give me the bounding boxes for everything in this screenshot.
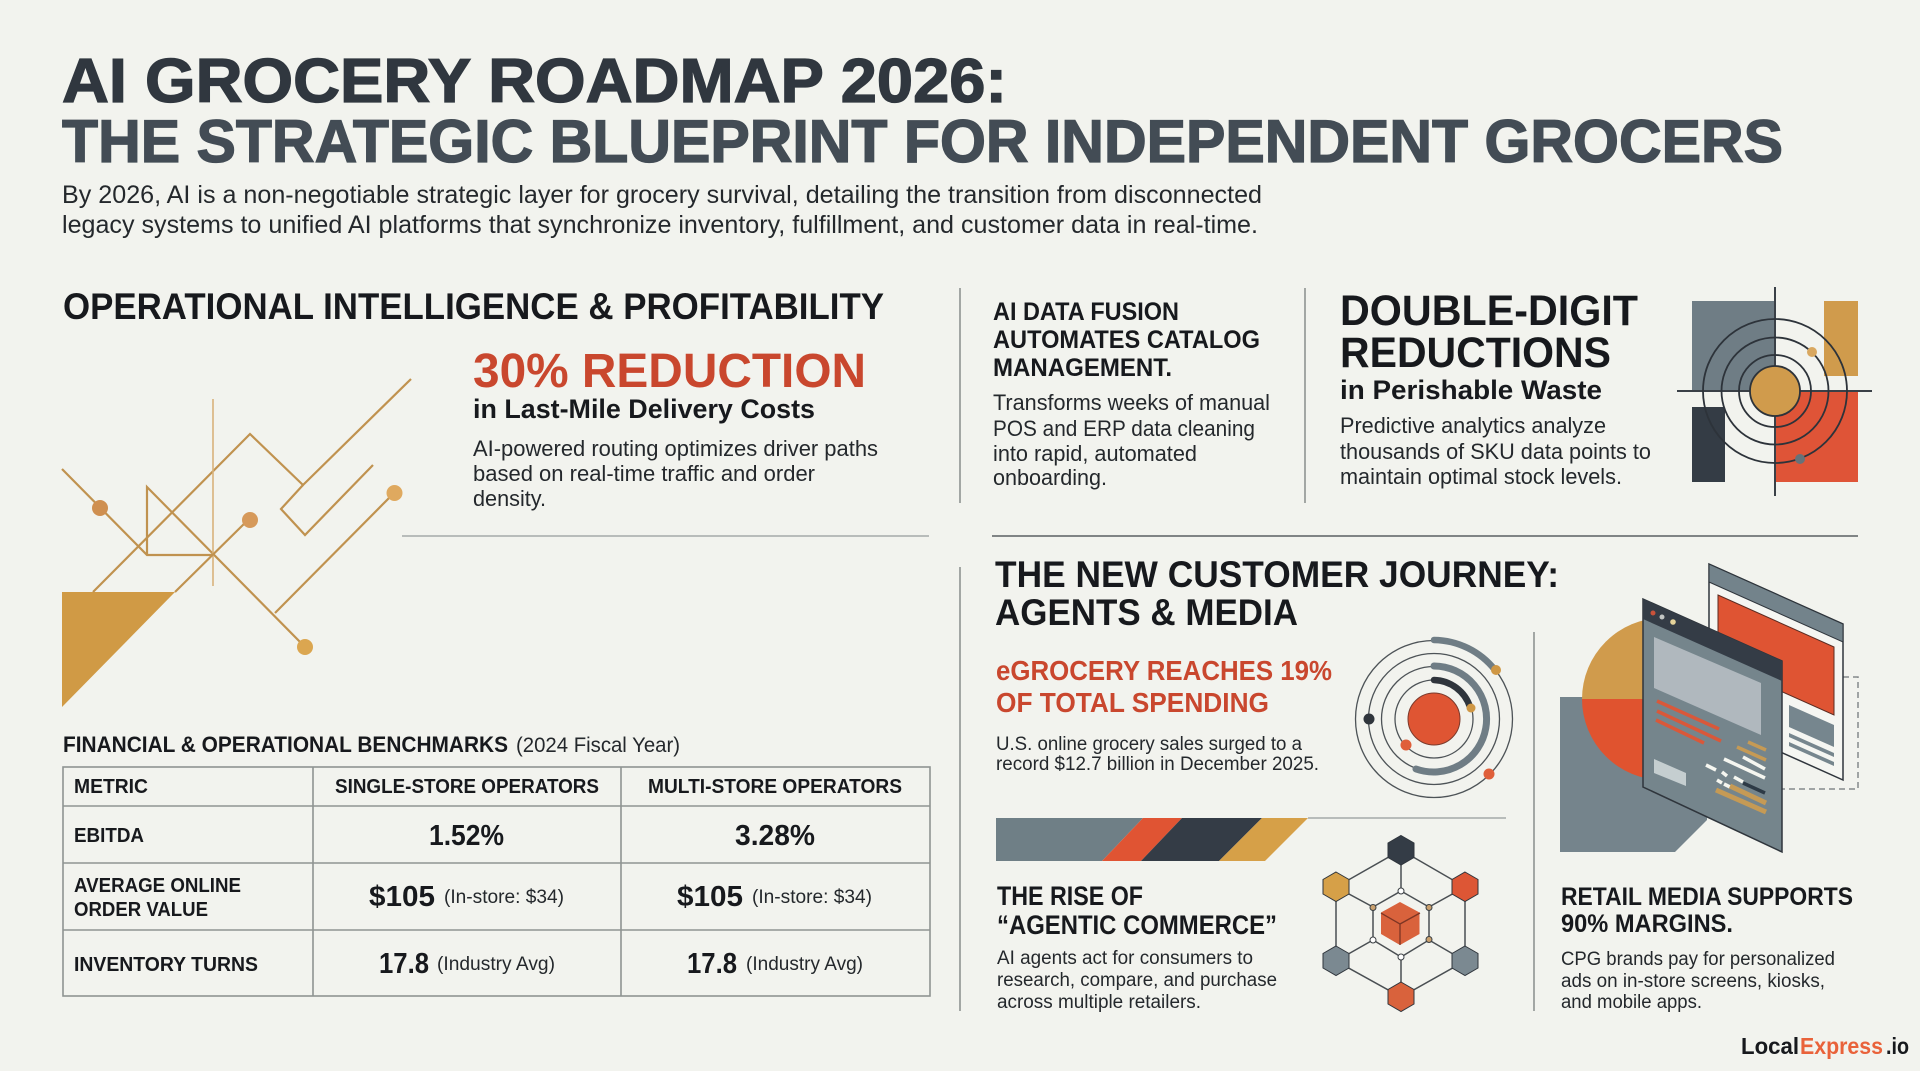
benchmarks table: 3.28% [735,820,815,852]
logo: LocalExpress.io [1741,1033,1909,1059]
title: AI GROCERY ROADMAP 2026: [62,47,1007,116]
illustration: delivery routes [62,379,411,707]
benchmarks table: ORDER VALUE [74,899,208,921]
stat: eGrocery share: U.S. online grocery sales surged to a [996,734,1302,755]
heading: new customer journey [995,553,1559,633]
icon: orbit rings [1356,640,1512,798]
panel: agentic commerce: AI agents act for consumers to [997,948,1253,969]
illustration: retail media screens [1560,564,1858,852]
stat: eGrocery share: record $12.7 billion in December 2025. [996,754,1319,775]
panel: AI data fusion [993,298,1270,490]
icon: hexagon network [1323,836,1478,1012]
benchmarks table: (In-store: $34) [444,887,564,908]
benchmarks table: $105 [677,881,743,913]
benchmarks table: INVENTORY TURNS [74,954,258,976]
table heading: FINANCIAL & OPERATIONAL BENCHMARKS [63,732,508,757]
benchmarks table: 1.52% [429,820,504,852]
stat: eGrocery share: eGROCERY REACHES 19% [996,655,1332,686]
panel: double-digit reductions: maintain optimal stock levels. [1340,464,1622,489]
panel: double-digit reductions: REDUCTIONS [1340,329,1611,377]
benchmarks table: (Industry Avg) [746,954,863,975]
panel: retail media: 90% MARGINS. [1561,910,1733,938]
benchmarks table: AVERAGE ONLINE [74,875,241,897]
callout: 30% reduction [473,345,878,511]
benchmarks table: 17.8 [379,948,429,980]
benchmarks table: $105 [369,881,435,913]
panel: retail media: ads on in-store screens, kiosks, [1561,971,1825,992]
panel: retail media: RETAIL MEDIA SUPPORTS [1561,883,1853,911]
benchmarks table: MULTI-STORE OPERATORS [648,776,902,798]
panel: AI data fusion: AI DATA FUSION [993,298,1179,326]
panel: AI data fusion: MANAGEMENT. [993,354,1172,382]
dashed connector [1780,677,1858,789]
panel: double-digit reductions: DOUBLE-DIGIT [1340,287,1638,335]
panel: double-digit reductions: in Perishable Waste [1340,375,1602,405]
icon: concentric target [1677,287,1872,496]
panel: double-digit reductions: Predictive analytics analyze [1340,413,1606,438]
callout: 30% reduction: 30% REDUCTION [473,345,866,398]
benchmarks table [63,767,930,996]
stat: eGrocery share: OF TOTAL SPENDING [996,687,1269,718]
heading: operational intelligence: OPERATIONAL INTELLIGENCE & PROFITABILITY [63,286,884,327]
logo: LocalExpress.io: Local [1741,1033,1799,1059]
panel: agentic commerce: THE RISE OF [997,881,1143,911]
panel: AI data fusion: AUTOMATES CATALOG [993,326,1260,354]
panel: agentic commerce: across multiple retailers. [997,992,1201,1013]
logo: LocalExpress.io: Express [1800,1033,1883,1059]
panel: AI data fusion: POS and ERP data cleaning [993,416,1255,441]
back screen [1709,564,1843,780]
benchmarks table: SINGLE-STORE OPERATORS [335,776,599,798]
table heading: (2024 Fiscal Year) [516,734,680,757]
callout: 30% reduction: based on real-time traffic and order [473,461,815,486]
stat: eGrocery share [996,655,1332,775]
heading: new customer journey: THE NEW CUSTOMER JOURNEY: [995,553,1559,595]
benchmarks table: EBITDA [74,825,144,847]
panel: AI data fusion: into rapid, automated [993,441,1197,466]
benchmarks table: (Industry Avg) [437,954,555,975]
logo: LocalExpress.io: .io [1886,1033,1909,1059]
heading: new customer journey: AGENTS & MEDIA [995,591,1298,633]
panel: AI data fusion: onboarding. [993,465,1107,490]
benchmarks table: (In-store: $34) [752,887,872,908]
title [62,47,1783,175]
intro paragraph: legacy systems to unified AI platforms that synchronize inventory, fulfillment, and customer data in real-time. [62,211,1258,239]
panel: retail media: and mobile apps. [1561,992,1702,1013]
intro paragraph [62,181,1262,239]
panel: double-digit reductions [1340,287,1651,489]
front screen [1643,599,1782,852]
callout: 30% reduction: in Last-Mile Delivery Costs [473,394,815,424]
panel: agentic commerce: research, compare, and purchase [997,970,1277,991]
panel: retail media [1561,883,1853,1013]
panel: double-digit reductions: thousands of SKU data points to [1340,439,1651,464]
benchmarks table: METRIC [74,776,148,798]
panel: AI data fusion: Transforms weeks of manual [993,390,1270,415]
panel: retail media: CPG brands pay for personalized [1561,949,1835,970]
benchmarks table: 17.8 [687,948,737,980]
panel: agentic commerce: “AGENTIC COMMERCE” [997,910,1277,940]
panel: agentic commerce [997,881,1277,1013]
decorative colour strip [996,818,1308,861]
callout: 30% reduction: AI-powered routing optimizes driver paths [473,436,878,461]
callout: 30% reduction: density. [473,486,546,511]
title: THE STRATEGIC BLUEPRINT FOR INDEPENDENT GROCERS [62,108,1783,175]
intro paragraph: By 2026, AI is a non-negotiable strategic layer for grocery survival, detailing the transition from disconnected [62,181,1262,209]
